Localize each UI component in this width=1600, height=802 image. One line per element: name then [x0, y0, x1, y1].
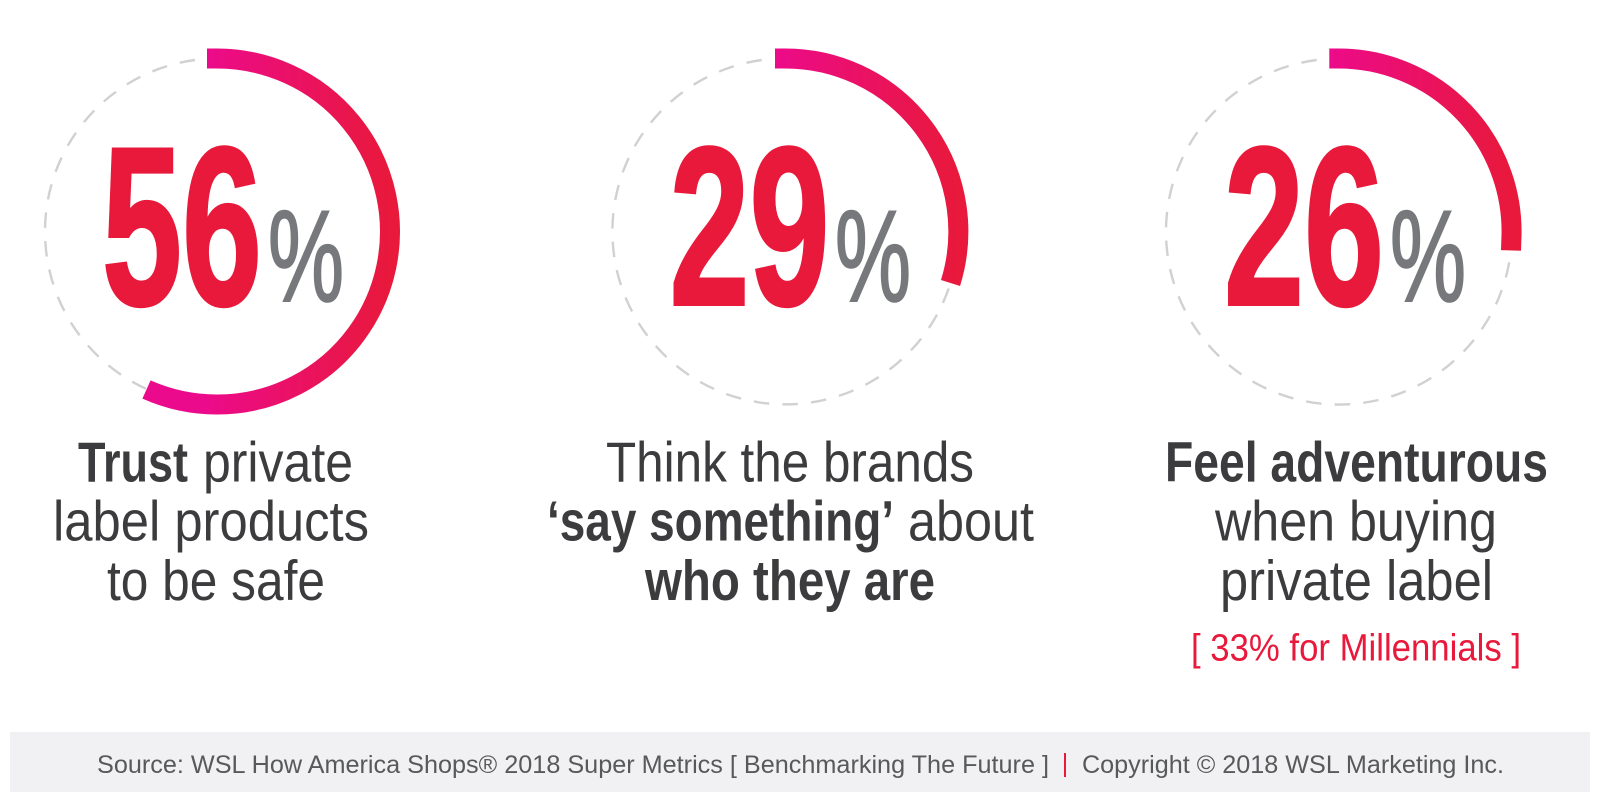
caption: trust: label products: [53, 490, 369, 554]
stat: 29%: %: [835, 183, 911, 329]
caption: trust: [53, 431, 369, 613]
caption: adventurous: [1165, 431, 1548, 613]
caption: adventurous: private label: [1220, 549, 1493, 613]
donut gauge: 26%: [1166, 58, 1512, 405]
stat: 56%: %: [268, 183, 344, 329]
panel: 56% trust: [45, 58, 390, 613]
caption: brands: ‘say something’: [547, 490, 894, 554]
stat: 26%: %: [1390, 183, 1466, 329]
caption: adventurous: when buying: [1214, 490, 1497, 554]
stat: 26%: 26: [1224, 100, 1384, 352]
caption: brands: [547, 431, 1034, 613]
source text: Source: WSL How America Shops® 2018 Super Metrics [ Benchmarking The Future ]: [97, 751, 1049, 779]
donut gauge: 29%: [612, 58, 958, 404]
callout: millennials: [ 33% for Millennials ]: [1191, 628, 1521, 670]
separator: [1064, 753, 1066, 777]
stat: 29%: 29: [670, 100, 830, 352]
caption: brands: Think the brands: [606, 431, 974, 495]
copyright text: Copyright © 2018 WSL Marketing Inc.: [1082, 751, 1504, 779]
caption: brands: who they are: [644, 549, 935, 613]
donut gauge: 56%: [45, 58, 390, 404]
panel: 26% adventurous: [1165, 58, 1548, 670]
panel: 29% brands: [547, 58, 1034, 613]
footer band: [10, 732, 1590, 792]
caption: brands: about: [908, 490, 1034, 554]
caption: trust: private: [203, 431, 353, 495]
caption: trust: to be safe: [107, 549, 325, 613]
stat: 56%: 56: [102, 100, 262, 352]
caption: trust: Trust: [78, 431, 188, 495]
